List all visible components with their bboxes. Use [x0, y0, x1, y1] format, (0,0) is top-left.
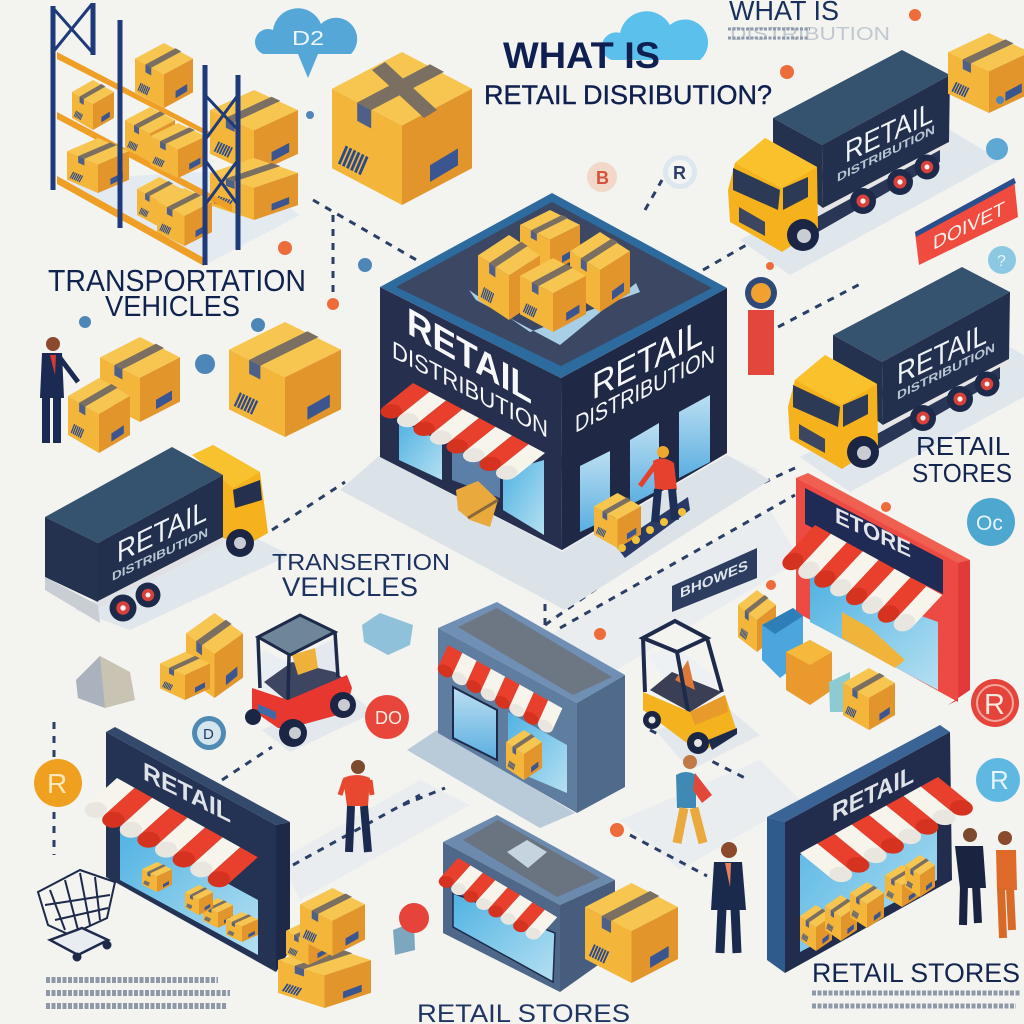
right sign text: RETAIL	[592, 310, 703, 408]
badge: circle top right	[986, 138, 1008, 160]
badge: blue R	[976, 758, 1020, 802]
truck: top right: DISTRIBUTION	[837, 122, 935, 185]
title	[484, 35, 772, 110]
badge: B	[587, 162, 617, 192]
badge: red R: R	[984, 689, 1005, 721]
badge: orange R	[34, 759, 82, 807]
pallet	[469, 283, 640, 345]
door and windows	[399, 395, 710, 535]
truck: right	[788, 267, 1024, 492]
store: bottom left retail	[80, 727, 290, 972]
heading: transertion vehicles: VEHICLES	[282, 572, 418, 602]
store: red right	[778, 473, 970, 705]
title: WHAT IS	[503, 35, 660, 76]
cloud: D2	[255, 8, 357, 78]
badge: orange R: R	[47, 768, 67, 799]
truck: top right: RETAIL	[845, 94, 933, 170]
badge: blue R: R	[990, 765, 1009, 795]
badge: OK: Oc	[976, 512, 1003, 535]
badge: teal ring: D	[203, 726, 214, 743]
secondary heading top right: DISTRIBUTION	[730, 24, 890, 44]
store: bottom centre	[436, 815, 678, 992]
small blue dots	[79, 96, 1004, 374]
heading: retail stores right	[912, 431, 1012, 488]
businessman	[711, 842, 746, 953]
truck: left: DISTRIBUTION	[112, 525, 208, 584]
ground path panels	[280, 455, 800, 900]
shelving unit with boxes	[53, 3, 300, 266]
small parcel icon	[76, 656, 135, 708]
store: grey centre	[407, 602, 625, 828]
central distribution building	[340, 193, 770, 610]
forklift: yellow	[643, 621, 760, 770]
truck: left	[45, 445, 290, 630]
worker in red	[340, 760, 372, 852]
cloud: D2: D2	[292, 28, 324, 50]
workers at right store	[955, 828, 1017, 938]
heading: retail stores right: RETAIL	[916, 431, 1010, 461]
badge: DO red	[365, 695, 409, 739]
badge: DO red: DO	[375, 708, 402, 728]
label: stores tag: BHOWES	[680, 558, 748, 602]
store: bottom left retail: RETAIL	[143, 756, 231, 829]
cloud behind title	[602, 11, 708, 60]
fine print: bottom right	[812, 993, 1020, 1006]
pin marker	[745, 277, 777, 375]
store: red right: ETORE	[835, 502, 911, 562]
truck: left: RETAIL	[117, 492, 207, 570]
right sign text: DISTRIBUTION	[575, 341, 715, 439]
box group: left small	[160, 613, 243, 700]
small package	[456, 481, 498, 527]
left sign text: DISTRIBUTION	[392, 336, 548, 444]
worker with conveyor	[594, 446, 690, 558]
badge: R	[663, 155, 697, 189]
label: stores tag	[672, 548, 757, 612]
worker walking	[676, 755, 712, 843]
store: bottom right retail	[767, 725, 978, 973]
fine print: bottom left	[46, 980, 230, 1006]
badge: question: ?	[997, 253, 1006, 270]
truck: right: RETAIL	[897, 315, 987, 392]
coloured merchandise boxes	[738, 590, 895, 730]
heading: retail stores bottom right: RETAIL STORES	[812, 958, 1020, 988]
awning	[376, 383, 545, 483]
heading: retail stores right: STORES	[912, 458, 1012, 488]
forklift: red	[245, 615, 375, 752]
badge: B: B	[596, 168, 609, 188]
big taped box	[332, 52, 472, 205]
truck: top right	[728, 50, 1000, 275]
badge: R: R	[673, 163, 686, 183]
label: DOIVET	[915, 178, 1018, 265]
box stack: bottom left	[278, 888, 371, 1008]
title: RETAIL DISRIBUTION?	[484, 80, 772, 110]
heading: transertion vehicles: TRANSERTION	[272, 549, 450, 575]
small tools icon	[393, 903, 429, 955]
left sign text: RETAIL	[407, 299, 532, 413]
heading: transportation vehicles	[48, 263, 306, 323]
box: top right	[948, 33, 1024, 113]
dashed connection lines	[54, 180, 862, 876]
truck: right: DISTRIBUTION	[897, 340, 995, 403]
icon: shopping cart	[38, 870, 115, 960]
worker with boxes	[40, 337, 180, 453]
box: centre left	[229, 322, 341, 437]
badge: question	[988, 246, 1016, 274]
heading: transportation vehicles: TRANSPORTATION	[48, 263, 306, 298]
badge: teal ring	[192, 716, 226, 750]
label: DOIVET: DOIVET	[933, 198, 1005, 255]
badge: red R	[971, 679, 1019, 727]
store: bottom right retail: RETAIL	[832, 759, 914, 828]
small orange dots	[278, 9, 921, 837]
secondary heading top right	[728, 0, 890, 44]
rooftop boxes	[478, 210, 630, 332]
badge: OK	[967, 498, 1015, 546]
heading: transportation vehicles: VEHICLES	[105, 291, 240, 323]
heading: transertion vehicles	[272, 549, 450, 602]
icon: small blue box	[362, 613, 413, 655]
